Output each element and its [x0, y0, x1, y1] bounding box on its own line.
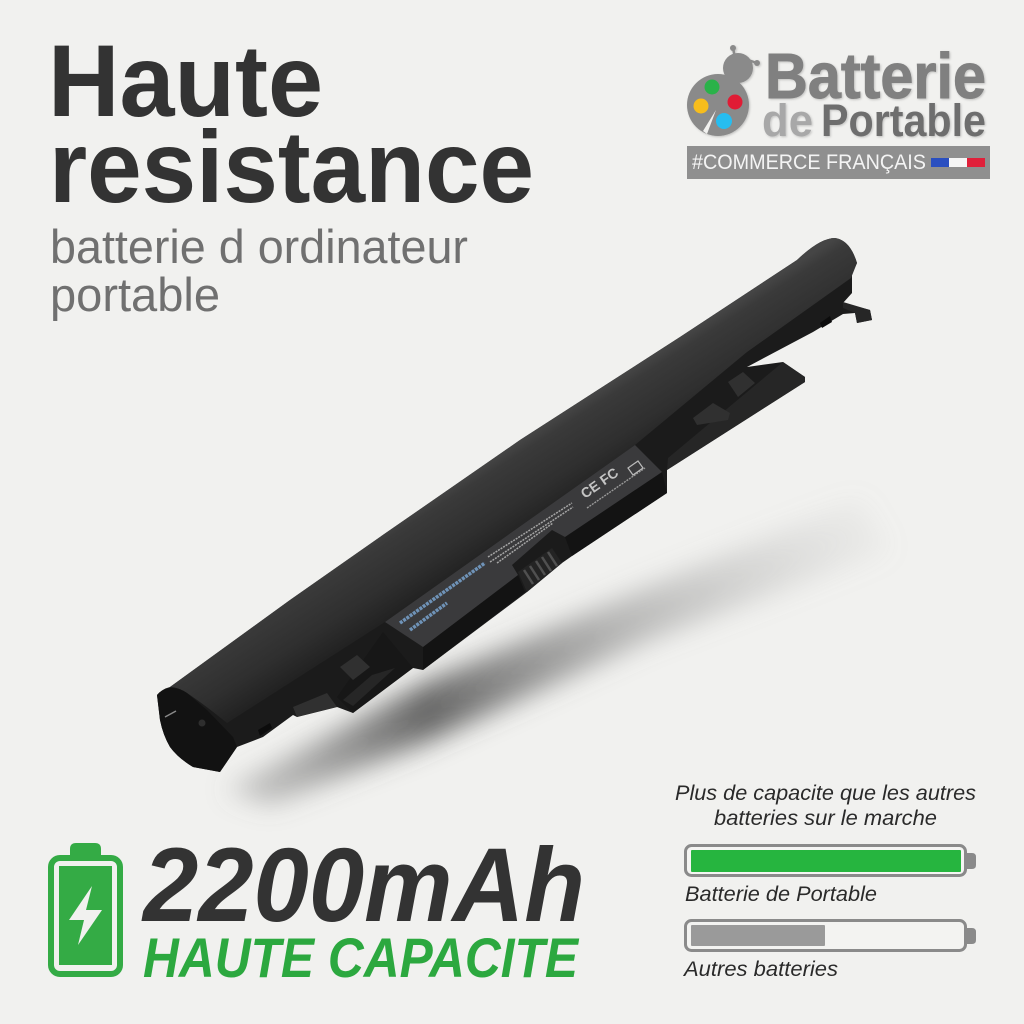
subtitle — [50, 220, 468, 321]
logo banner — [687, 146, 990, 179]
icon: French flag — [931, 158, 985, 167]
comparison caption: Plus de capacite que les autres — [675, 781, 976, 805]
lower plate left — [337, 632, 413, 713]
icon: green battery with bolt — [51, 843, 120, 974]
logo wordmark: Portable — [821, 95, 986, 146]
title: resistance — [49, 110, 534, 224]
battery shadow — [225, 500, 890, 805]
right end hook — [843, 302, 872, 323]
comparison caption: batteries sur le marche — [714, 806, 937, 830]
logo wordmark: Batterie — [765, 40, 986, 112]
title — [48, 24, 534, 224]
battery tube — [170, 238, 857, 723]
grey label lines — [488, 503, 573, 563]
subtitle: batterie d ordinateur — [50, 220, 468, 273]
battery silhouette and lower flange — [157, 238, 872, 772]
battery end cap — [157, 688, 237, 772]
comparison caption — [675, 781, 976, 830]
logo wordmark — [762, 40, 986, 146]
subtitle: portable — [50, 268, 220, 321]
logo wordmark: de — [762, 95, 813, 146]
comparison bar: Batterie de Portable — [685, 846, 976, 906]
lower plate right — [667, 362, 805, 470]
tabs — [293, 372, 755, 717]
battery photo — [157, 238, 872, 772]
capacity value: 2200mAh — [141, 827, 585, 944]
icon: ladybug palette — [687, 45, 760, 136]
logo: Batterie de Portable — [687, 40, 990, 179]
capacity subtitle: HAUTE CAPACITE — [143, 926, 579, 989]
connector — [518, 548, 562, 592]
comparison bar: Autres batteries — [682, 920, 976, 981]
title: Haute — [48, 24, 323, 138]
comparison bar: Autres batteries: Autres batteries — [682, 957, 838, 981]
small clips — [258, 316, 832, 736]
certification marks: CE FC — [578, 464, 621, 501]
label strip front faces — [423, 472, 667, 670]
blue label lines — [400, 563, 485, 630]
logo banner: #COMMERCE FRANÇAIS — [692, 151, 926, 174]
comparison bar: Batterie de Portable: Batterie de Portable — [685, 882, 877, 906]
label strip top face — [385, 445, 662, 647]
